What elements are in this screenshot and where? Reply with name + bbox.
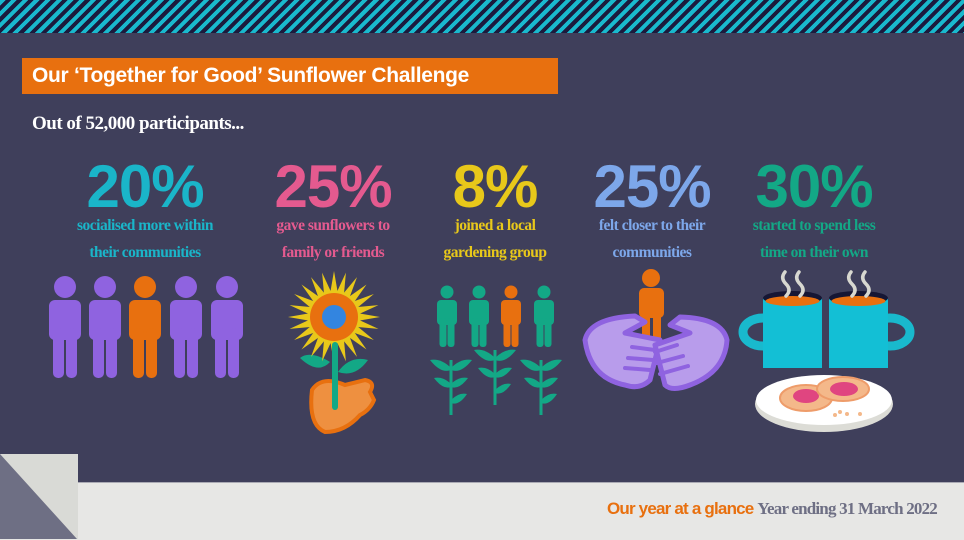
stat 4	[593, 153, 711, 261]
text: 25%	[593, 153, 711, 220]
footer text: Our year at a glance Year ending 31 March 2022	[607, 499, 937, 518]
stat 1	[77, 153, 214, 261]
text: 30%	[755, 153, 873, 220]
icon: mugs and biscuits	[743, 272, 910, 432]
text: communities	[613, 244, 691, 261]
text: gardening group	[444, 244, 546, 261]
footer bar	[0, 482, 964, 540]
icon: gardening group	[430, 286, 562, 415]
text: started to spend less	[753, 217, 875, 234]
text: 25%	[274, 153, 392, 220]
text: 8%	[453, 153, 537, 220]
top stripe band	[0, 0, 964, 33]
stat 5	[753, 153, 876, 261]
text: time on their own	[760, 244, 868, 261]
stat 3	[444, 153, 546, 261]
subtitle: Out of 52,000 participants...	[32, 113, 244, 134]
text: joined a local	[455, 217, 535, 234]
title banner	[22, 58, 558, 94]
text: family or friends	[282, 244, 384, 261]
text: felt closer to their	[599, 217, 705, 234]
icon: five people	[49, 276, 243, 378]
text: socialised more within	[77, 217, 213, 234]
icon: hands holding person	[585, 269, 727, 388]
text: 20%	[86, 153, 204, 220]
text: their communities	[89, 244, 201, 261]
icon: sunflower in hand	[288, 271, 380, 432]
text: gave sunflowers to	[276, 217, 390, 234]
stat 2	[274, 153, 392, 261]
corner triangle	[0, 454, 78, 539]
title banner: Our ‘Together for Good’ Sunflower Challenge	[32, 64, 469, 87]
